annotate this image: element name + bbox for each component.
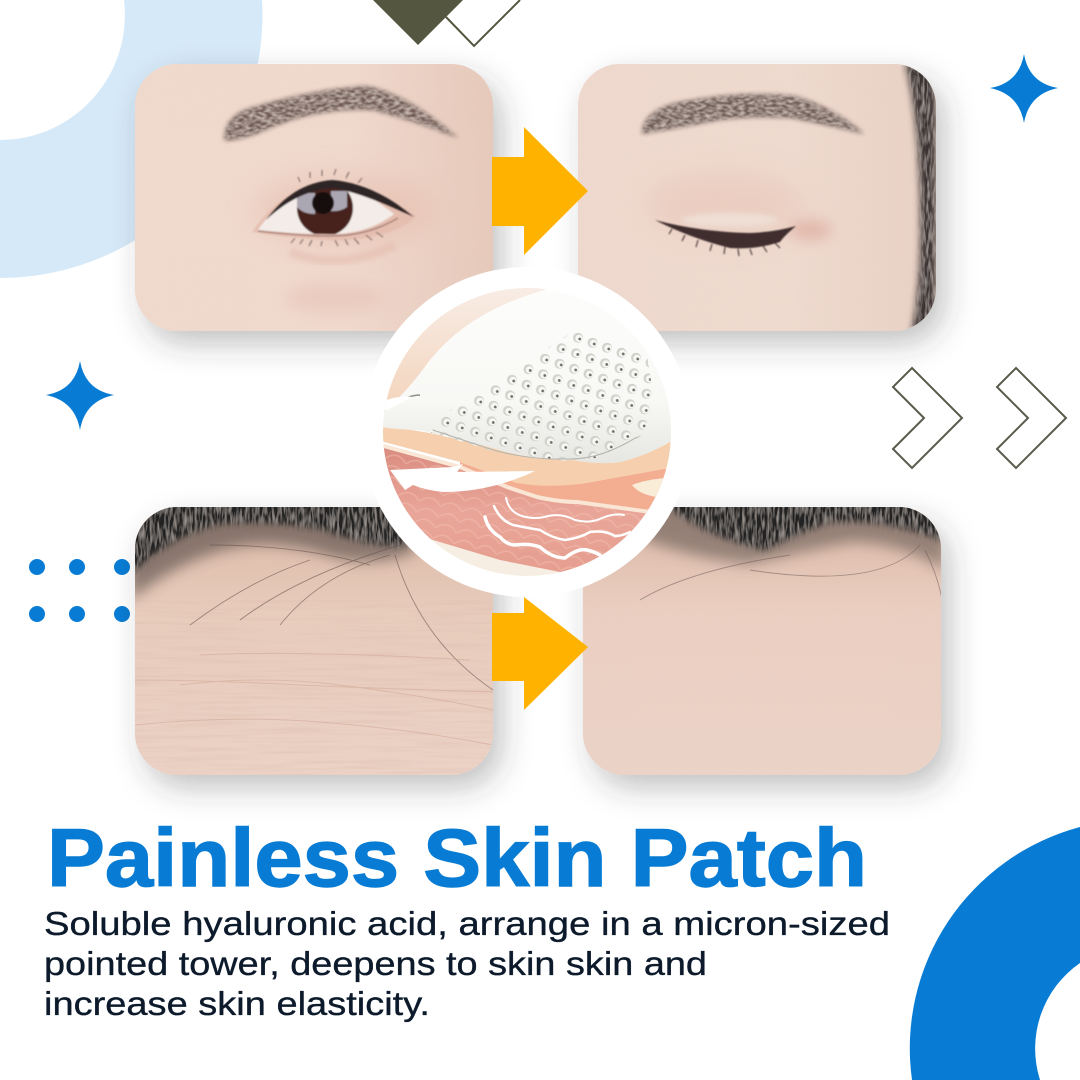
cream base	[431, 539, 560, 576]
blue dot grid, left	[29, 559, 130, 622]
icon: eyebrow	[642, 94, 864, 134]
photo panel: smooth forehead after	[583, 500, 945, 775]
white patch	[380, 285, 680, 463]
icon: eyebrow	[224, 86, 458, 140]
decorative light-blue ring, top left	[0, 0, 262, 278]
dermis band	[460, 462, 666, 512]
muscle layer	[384, 446, 647, 572]
photo panel: wrinkled forehead before	[130, 500, 493, 775]
icon: blue sparkle, top right	[990, 54, 1058, 123]
white arrow	[390, 464, 535, 492]
collagen waves	[485, 498, 630, 558]
body text: Soluble hyaluronic acid, arrange in a micron-sized	[44, 906, 890, 943]
pore highlight	[632, 478, 663, 497]
body text: pointed tower, deepens to skin skin and	[44, 946, 707, 983]
arrow: bottom, before to after	[492, 597, 588, 710]
photo panel: open eye before	[135, 64, 493, 331]
icon: blue sparkle, left	[46, 361, 114, 430]
circular inset: microneedle patch illustration	[362, 267, 692, 597]
icon: open eye	[250, 169, 416, 246]
microneedle dots	[430, 331, 655, 461]
outline chevrons, right	[893, 368, 1066, 468]
body text	[44, 906, 890, 1023]
title: Painless Skin Patch	[47, 813, 867, 904]
epidermis tan band	[380, 427, 680, 486]
arrow: top, before to after	[492, 127, 588, 255]
peach skin background	[380, 285, 548, 415]
forehead wrinkles	[135, 653, 493, 745]
cream line	[384, 444, 648, 514]
hairline	[130, 500, 415, 600]
icon: closed eye lashes	[655, 220, 796, 256]
decorative blue ring, bottom right	[910, 827, 1080, 1080]
photo panel: closed eye after	[578, 64, 936, 331]
body text: increase skin elasticity.	[44, 986, 430, 1023]
hairline	[640, 500, 945, 570]
decorative olive diamonds, top	[373, 0, 520, 46]
hair at temple	[905, 64, 936, 331]
